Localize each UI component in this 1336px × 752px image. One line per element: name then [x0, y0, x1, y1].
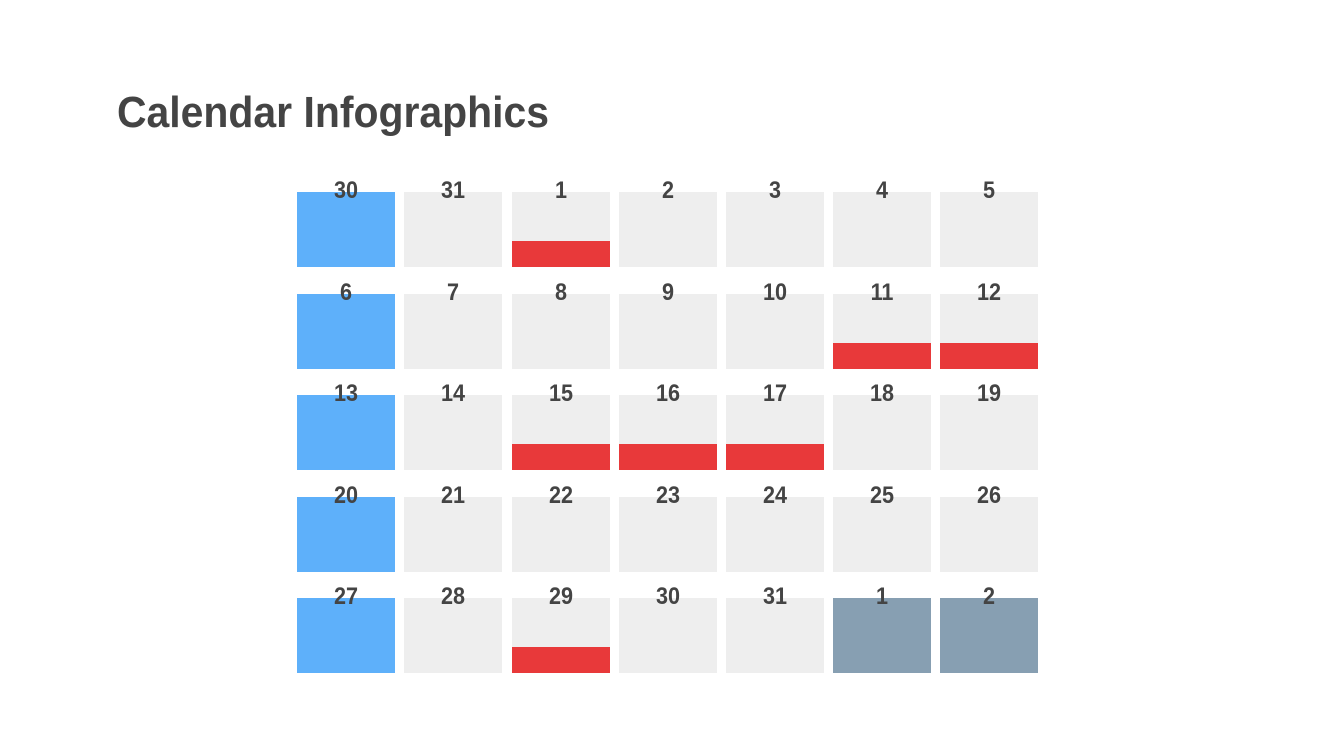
calendar grid: 26	[977, 482, 1001, 509]
calendar grid: 11	[871, 279, 893, 306]
calendar grid: 3	[769, 177, 781, 204]
calendar grid: 20	[334, 482, 358, 509]
calendar grid: 5	[983, 177, 995, 204]
calendar grid: 25	[870, 482, 894, 509]
calendar grid: 31	[763, 583, 787, 610]
calendar grid: 15	[549, 380, 573, 407]
calendar grid: 1	[876, 583, 888, 610]
calendar grid: 19	[977, 380, 1001, 407]
calendar grid: 2	[983, 583, 995, 610]
calendar grid: 21	[441, 482, 465, 509]
calendar grid: 10	[763, 279, 787, 306]
calendar grid: 9	[662, 279, 674, 306]
calendar grid: 2	[662, 177, 674, 204]
calendar grid: 17	[763, 380, 787, 407]
calendar grid: 31	[441, 177, 465, 204]
calendar grid: 30	[334, 177, 358, 204]
calendar grid: 30	[656, 583, 680, 610]
calendar grid: 24	[763, 482, 787, 509]
calendar grid: 13	[334, 380, 358, 407]
title: Calendar Infographics	[117, 88, 549, 137]
calendar grid: 28	[441, 583, 465, 610]
calendar grid: 1	[555, 177, 567, 204]
calendar grid: 16	[656, 380, 680, 407]
calendar grid: 12	[977, 279, 1001, 306]
calendar grid: 27	[334, 583, 358, 610]
calendar grid: 23	[656, 482, 680, 509]
calendar grid: 29	[549, 583, 573, 610]
calendar grid: 8	[555, 279, 567, 306]
calendar grid: 4	[876, 177, 888, 204]
calendar grid: 22	[549, 482, 573, 509]
calendar grid: 7	[447, 279, 459, 306]
calendar grid: 14	[441, 380, 465, 407]
calendar grid: 6	[340, 279, 352, 306]
calendar grid: 18	[870, 380, 894, 407]
